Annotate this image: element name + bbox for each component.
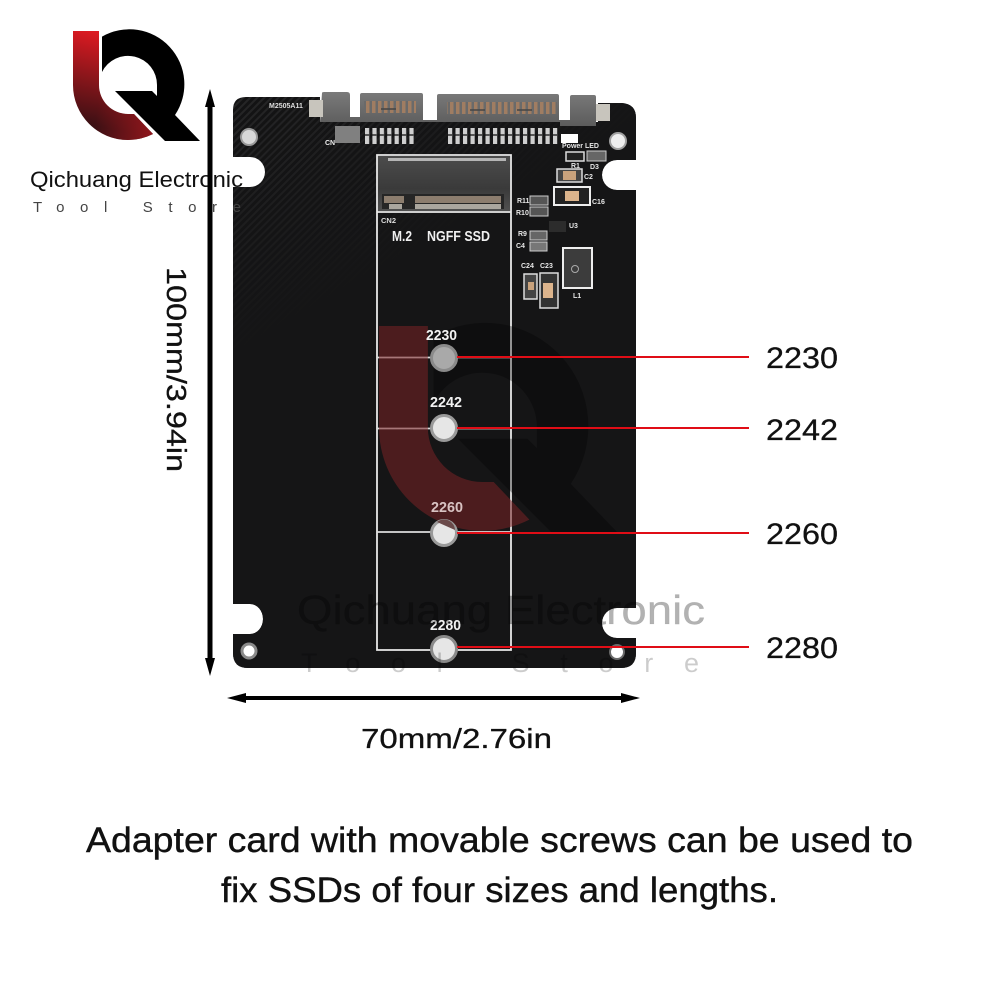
arrow: height (205, 89, 215, 676)
component labels (516, 143, 605, 300)
component labels: L1 (573, 293, 581, 300)
watermark: store name (297, 587, 705, 678)
screw hole: 2260: 2260 (431, 499, 463, 516)
screw hole: 2230 (426, 327, 457, 370)
panel: adapter board (233, 92, 636, 668)
SATA connector (309, 92, 610, 144)
SMD components (524, 151, 606, 308)
watermark: store name: Qichuang Electronic (297, 587, 705, 633)
board shading (233, 97, 636, 668)
M.2 slot: M.2 (392, 228, 412, 245)
screw hole: 2230: 2230 (426, 327, 457, 344)
caption: fix SSDs of four sizes and lengths. (221, 871, 778, 910)
logo: black Q (102, 29, 200, 141)
board label: M2505A11 (269, 103, 303, 110)
callout: 2260: 2260 (766, 518, 838, 551)
M.2 slot (377, 155, 511, 650)
socket (377, 156, 510, 211)
component labels: D3 (590, 164, 599, 171)
board body (233, 97, 636, 668)
caption (86, 821, 913, 910)
callout: 2230: 2230 (766, 342, 838, 375)
watermark: store name: Tool Store (301, 648, 699, 678)
logo (73, 29, 200, 141)
screw hole: 2280: 2280 (430, 617, 461, 634)
height label: 100mm/3.94in (161, 267, 192, 472)
store subtitle: Tool Store (33, 199, 241, 216)
component labels: R10 (516, 210, 529, 217)
arrow: width (227, 693, 640, 703)
store name: Qichuang Electronic (30, 167, 243, 192)
component labels: R1 (571, 163, 580, 170)
component labels: C2 (584, 174, 593, 181)
slot labels: CN2 (381, 216, 396, 225)
contact pads (365, 128, 416, 144)
connector label: CN (325, 140, 335, 147)
screw hole: 2260 (431, 499, 463, 546)
component labels: C4 (516, 243, 525, 250)
width label: 70mm/2.76in (361, 723, 552, 754)
screw hole: 2242 (430, 394, 462, 440)
component labels: R11 (517, 198, 530, 205)
mounting holes (241, 129, 626, 659)
M.2 slot: NGFF SSD (427, 228, 490, 245)
watermark: logo (379, 323, 618, 533)
component labels: C24 (521, 263, 534, 270)
callout: 2242: 2242 (766, 414, 838, 447)
component labels: R9 (518, 231, 527, 238)
component labels: U3 (569, 223, 578, 230)
callout: 2280: 2280 (766, 632, 838, 665)
screw hole: 2280 (430, 617, 461, 662)
logo: red L (73, 31, 153, 140)
component labels: C23 (540, 263, 553, 270)
slot outline (377, 155, 511, 650)
caption: Adapter card with movable screws can be used to (86, 821, 913, 860)
component labels: C16 (592, 199, 605, 206)
component labels: Power LED (562, 143, 599, 150)
position lines (377, 358, 511, 532)
screw hole: 2242: 2242 (430, 394, 462, 411)
